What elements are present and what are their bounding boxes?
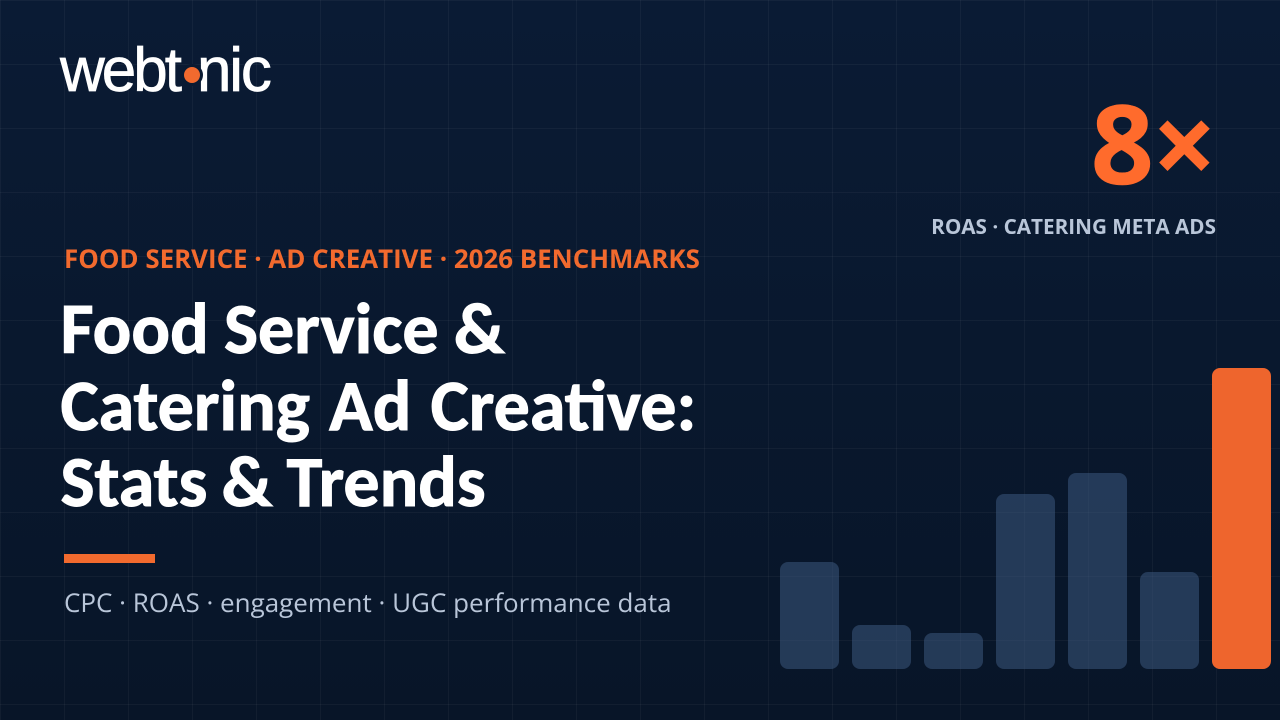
bar 7: highlighted: [1212, 368, 1271, 669]
title: [60, 285, 696, 526]
title: Catering Ad Creative:: [60, 362, 696, 450]
accent divider: [64, 554, 155, 563]
bar 2: [852, 625, 911, 669]
stat label: ROAS · CATERING META ADS: [931, 213, 1216, 241]
bar 5: [1068, 473, 1127, 669]
logo: webtonic: nic: [197, 36, 270, 105]
title: Food Service &: [60, 285, 505, 373]
title: Stats & Trends: [60, 438, 486, 526]
stat: 8x value: 8×: [1091, 65, 1217, 220]
bar 4: [996, 494, 1055, 669]
bar 6: [1140, 572, 1199, 669]
bar 3: [924, 633, 983, 669]
subtitle: CPC · ROAS · engagement · UGC performance data: [64, 584, 672, 620]
bar 1: [780, 562, 839, 669]
logo: webtonic: [60, 36, 271, 105]
logo: webtonic: webt: [60, 36, 179, 105]
bar chart: [780, 368, 1271, 669]
eyebrow: FOOD SERVICE · AD CREATIVE · 2026 BENCHMARKS: [64, 240, 700, 276]
